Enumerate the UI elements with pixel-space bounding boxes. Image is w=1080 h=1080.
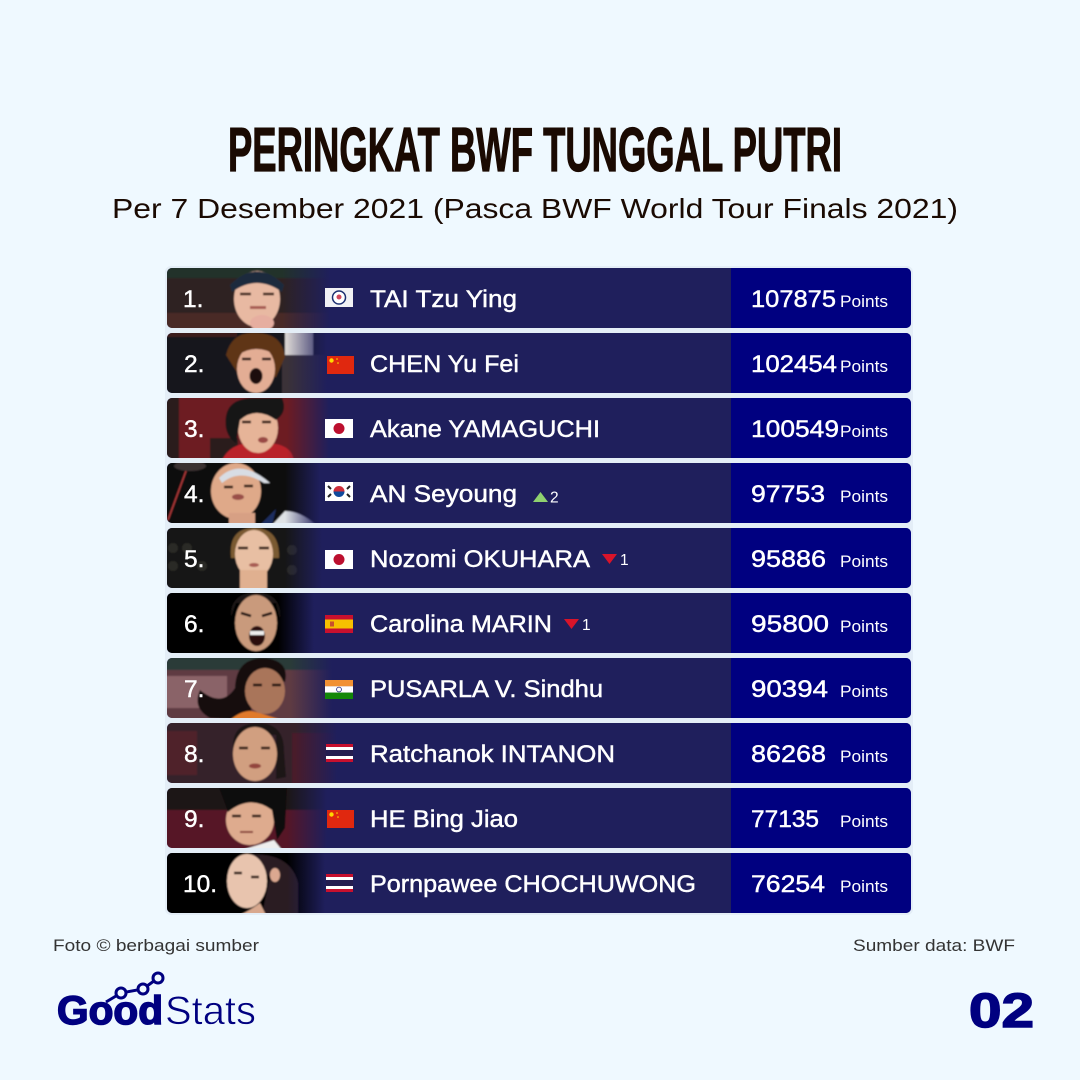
row 5: Nozomi OKUHARA: Points — [840, 553, 888, 571]
row 7: PUSARLA V. Sindhu: Points — [840, 683, 888, 701]
rank number: 10. — [183, 871, 217, 898]
subtitle: Per 7 Desember 2021 (Pasca BWF World Tour Finals 2021) — [112, 193, 958, 224]
rank change: down 1: 1 — [582, 617, 591, 634]
row 1: TAI Tzu Ying — [167, 268, 911, 328]
points: 86268 — [751, 741, 826, 768]
flag: China — [327, 356, 354, 374]
name: Akane YAMAGUCHI — [370, 416, 600, 443]
rank number: 9. — [184, 806, 204, 833]
flag: South Korea — [325, 482, 353, 501]
page number: 02 — [969, 985, 1034, 1038]
rank change: down 1: 1 — [620, 552, 629, 569]
name: Pornpawee CHOCHUWONG — [370, 871, 696, 898]
flag: Thailand — [326, 874, 353, 892]
photo credit: Foto © berbagai sumber — [53, 936, 259, 955]
row 3: Akane YAMAGUCHI — [167, 398, 911, 458]
points: 76254 — [751, 871, 825, 898]
name: Carolina MARIN — [370, 611, 552, 638]
points: 90394 — [751, 676, 828, 703]
rank change: up 2: 2 — [550, 490, 559, 506]
flag: India — [325, 680, 353, 699]
points: 95886 — [751, 546, 826, 573]
ranking table — [157, 258, 913, 923]
row 1: TAI Tzu Ying: Points — [840, 293, 888, 311]
row 10: Pornpawee CHOCHUWONG — [167, 853, 911, 913]
row 6: Carolina MARIN — [167, 593, 911, 653]
flag: China — [327, 810, 354, 828]
points: 107875 — [751, 286, 836, 313]
flag: Spain — [325, 615, 353, 633]
row 4: AN Seyoung — [167, 463, 911, 523]
flag: Thailand — [326, 744, 353, 762]
name: CHEN Yu Fei — [370, 351, 519, 378]
name: AN Seyoung — [370, 481, 517, 508]
rank number: 1. — [183, 286, 203, 313]
points: 77135 — [751, 806, 819, 833]
rank change: up 2 — [533, 490, 559, 506]
rank change: down 1 — [564, 617, 591, 634]
rank change: down 1 — [602, 552, 629, 569]
rank number: 4. — [184, 481, 204, 508]
data source: Sumber data: BWF — [853, 936, 1015, 955]
flag: Chinese Taipei — [325, 288, 353, 307]
row 10: Pornpawee CHOCHUWONG: Points — [840, 878, 888, 896]
rank number: 6. — [184, 611, 204, 638]
row 3: Akane YAMAGUCHI: Points — [840, 423, 888, 441]
row 4: AN Seyoung: Points — [840, 488, 888, 506]
rank number: 5. — [184, 546, 204, 573]
row 8: Ratchanok INTANON — [167, 723, 911, 783]
logo: GoodStats — [57, 973, 256, 1033]
row 9: HE Bing Jiao: Points — [840, 813, 888, 831]
rank number: 8. — [184, 741, 204, 768]
row 7: PUSARLA V. Sindhu — [167, 658, 911, 718]
logo: GoodStats: Stats — [165, 989, 256, 1033]
name: TAI Tzu Ying — [370, 286, 517, 313]
flag: Japan — [325, 419, 353, 438]
name: HE Bing Jiao — [370, 806, 518, 833]
row 2: CHEN Yu Fei: Points — [840, 358, 888, 376]
row 8: Ratchanok INTANON: Points — [840, 748, 888, 766]
name: Nozomi OKUHARA — [370, 546, 591, 573]
row 6: Carolina MARIN: Points — [840, 618, 888, 636]
row 2: CHEN Yu Fei — [167, 333, 911, 393]
points: 97753 — [751, 481, 825, 508]
rank number: 3. — [184, 416, 204, 443]
points: 100549 — [751, 416, 839, 443]
flag: Japan — [325, 550, 353, 569]
name: Ratchanok INTANON — [370, 741, 615, 768]
rank number: 7. — [184, 676, 204, 703]
points: 102454 — [751, 351, 837, 378]
rank number: 2. — [184, 351, 204, 378]
row 9: HE Bing Jiao — [167, 788, 911, 848]
name: PUSARLA V. Sindhu — [370, 676, 603, 703]
points: 95800 — [751, 611, 829, 638]
row 5: Nozomi OKUHARA — [167, 528, 911, 588]
logo: GoodStats: Good — [57, 989, 163, 1033]
